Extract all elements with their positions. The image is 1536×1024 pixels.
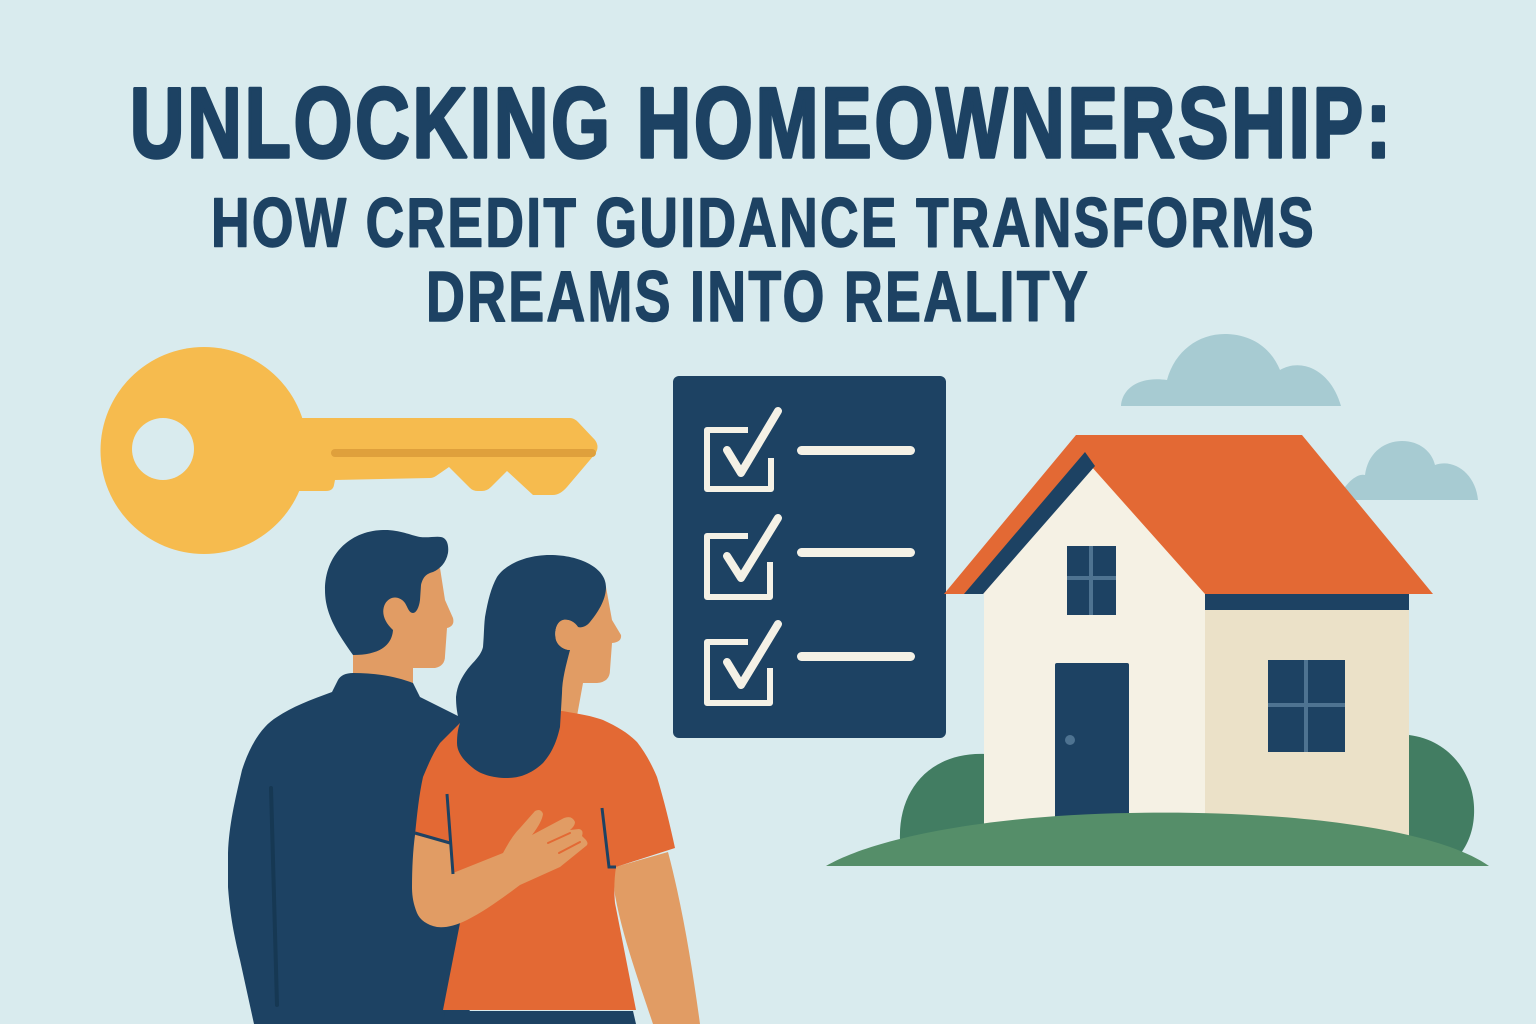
key hole <box>132 418 194 480</box>
roof shadow <box>964 452 1095 594</box>
illustration: couple <box>228 530 700 1024</box>
panel: checklist <box>673 376 946 738</box>
man arm line <box>271 788 277 1005</box>
man neck and face <box>353 568 453 690</box>
man <box>228 530 470 1024</box>
side window <box>1268 660 1345 752</box>
waistband <box>443 1011 636 1024</box>
woman neck and face <box>550 587 621 716</box>
door <box>1055 663 1129 823</box>
woman <box>412 555 700 1024</box>
woman shirt <box>415 711 675 1010</box>
roof <box>944 435 1433 594</box>
finger lines <box>548 833 580 853</box>
eave band <box>1205 594 1409 610</box>
bushes <box>900 735 1474 860</box>
checklist item 1 <box>707 411 915 489</box>
woman ear <box>555 620 586 650</box>
sleeve lines <box>415 794 616 874</box>
house side wall <box>1205 600 1409 840</box>
woman right arm <box>612 852 700 1024</box>
woman arm and hand <box>412 810 588 927</box>
checklist item 2 <box>707 518 915 597</box>
icon: small cloud <box>1338 441 1478 500</box>
illustration: house on hill <box>826 435 1489 866</box>
subtitle line 2: DREAMS INTO REALITY <box>426 258 1090 337</box>
upper window <box>1067 546 1116 615</box>
man torso <box>228 673 470 1024</box>
man hair <box>325 530 448 655</box>
icon: golden key <box>100 347 598 554</box>
key groove <box>331 449 596 457</box>
icon: large cloud <box>1121 334 1341 406</box>
house front wall <box>984 465 1205 840</box>
checklist item 3 <box>707 624 915 703</box>
hill <box>826 813 1489 866</box>
subtitle <box>211 184 1316 337</box>
woman hair <box>456 555 606 778</box>
